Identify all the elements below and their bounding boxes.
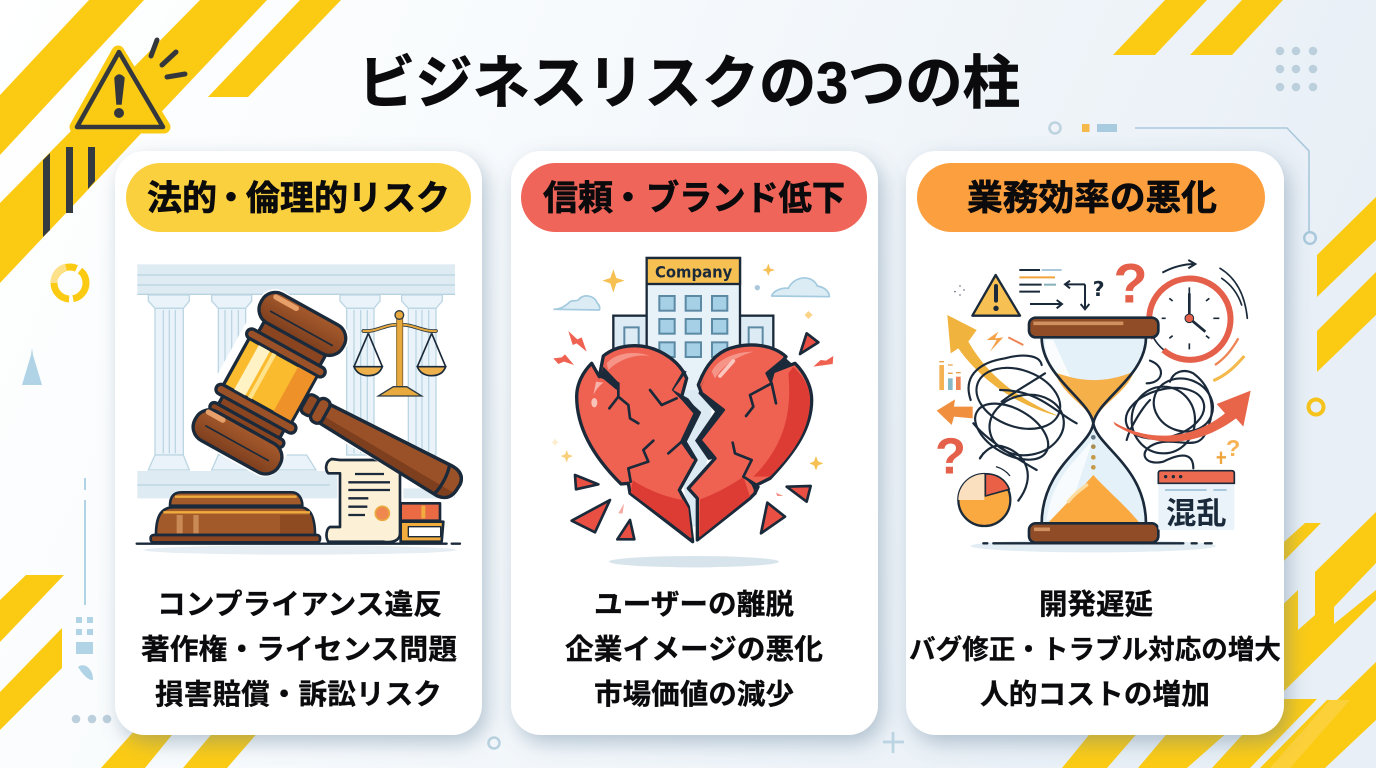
- scribbles: [966, 356, 1220, 501]
- illustration: broken heart over company building: [551, 258, 833, 567]
- building: Company: [655, 262, 733, 281]
- scales: [354, 311, 446, 396]
- sound block: [151, 492, 320, 542]
- illustration: hourglass among tangled lines: ?: [1093, 277, 1105, 301]
- window: confusion label: [1158, 471, 1234, 531]
- hourglass: [1029, 318, 1158, 543]
- text block: efficiency risk items: [909, 589, 1281, 711]
- heading pill: legal and ethical risk: [126, 163, 471, 232]
- heading pill: worsening operational efficiency: 業務効率の悪化: [967, 179, 1217, 218]
- panel: trust and brand decline: [511, 151, 878, 735]
- heading pill: legal and ethical risk: 倫理的リスク: [246, 180, 450, 218]
- text block: efficiency risk items: バグ修正・トラブル対応の増大: [909, 634, 1281, 665]
- text block: legal risk items: [141, 589, 457, 711]
- heading pill: trust and brand decline: 信頼: [543, 180, 614, 218]
- building: [613, 258, 773, 527]
- sparkles: [551, 263, 823, 471]
- illustration: hourglass among tangled lines: ?: [1113, 252, 1148, 315]
- clock: [1149, 268, 1247, 381]
- icon: warning triangle with alert rays: [76, 40, 185, 127]
- heading pill: trust and brand decline: [521, 163, 867, 232]
- panel: legal and ethical risk: [115, 151, 499, 735]
- task lines and arrows: [1019, 260, 1195, 309]
- title: ビジネスリスクの3つの柱: [358, 51, 1020, 116]
- heading pill: trust and brand decline: ブランド低下: [646, 179, 845, 218]
- pie chart: [958, 467, 1010, 526]
- warning sign: [972, 275, 1020, 316]
- text block: efficiency risk items: 人的コストの増加: [980, 679, 1210, 711]
- text block: trust risk items: [565, 589, 823, 711]
- illustration: hourglass among tangled lines: ?: [935, 427, 966, 484]
- heading pill: legal and ethical risk: 法的: [147, 180, 217, 218]
- text block: trust risk items: ユーザーの離脱: [594, 589, 794, 621]
- red rising arrow: [1113, 391, 1251, 442]
- heart left half: [577, 346, 699, 542]
- window: confusion label: 混乱: [1166, 497, 1227, 531]
- text block: legal risk items: コンプライアンス違反: [157, 589, 442, 621]
- text block: efficiency risk items: 開発遅延: [1039, 589, 1153, 621]
- illustration: gavel, courthouse, scales, scroll and books: [137, 264, 499, 561]
- heading pill: worsening operational efficiency: [917, 163, 1265, 232]
- scroll and books: [326, 459, 443, 542]
- heading pill: legal and ethical risk: ・: [214, 180, 248, 218]
- gavel: [188, 287, 499, 561]
- illustration: hourglass among tangled lines: ?: [1226, 435, 1240, 461]
- text block: legal risk items: 損害賠償・訴訟リスク: [155, 679, 442, 711]
- arrows behind tangles: [937, 315, 1060, 425]
- heart right half: [688, 345, 812, 540]
- illustration: hourglass among tangled lines: [935, 252, 1251, 552]
- shards and cracks sparks: [572, 333, 818, 539]
- clouds: [554, 278, 829, 310]
- text block: legal risk items: 著作権・ライセンス問題: [141, 634, 457, 666]
- text block: trust risk items: 企業イメージの悪化: [565, 634, 823, 666]
- heading pill: trust and brand decline: ・: [611, 180, 645, 218]
- panel: worsening operational efficiency: [906, 151, 1284, 735]
- small bar chart: [939, 362, 961, 390]
- text block: trust risk items: 市場価値の減少: [594, 679, 794, 711]
